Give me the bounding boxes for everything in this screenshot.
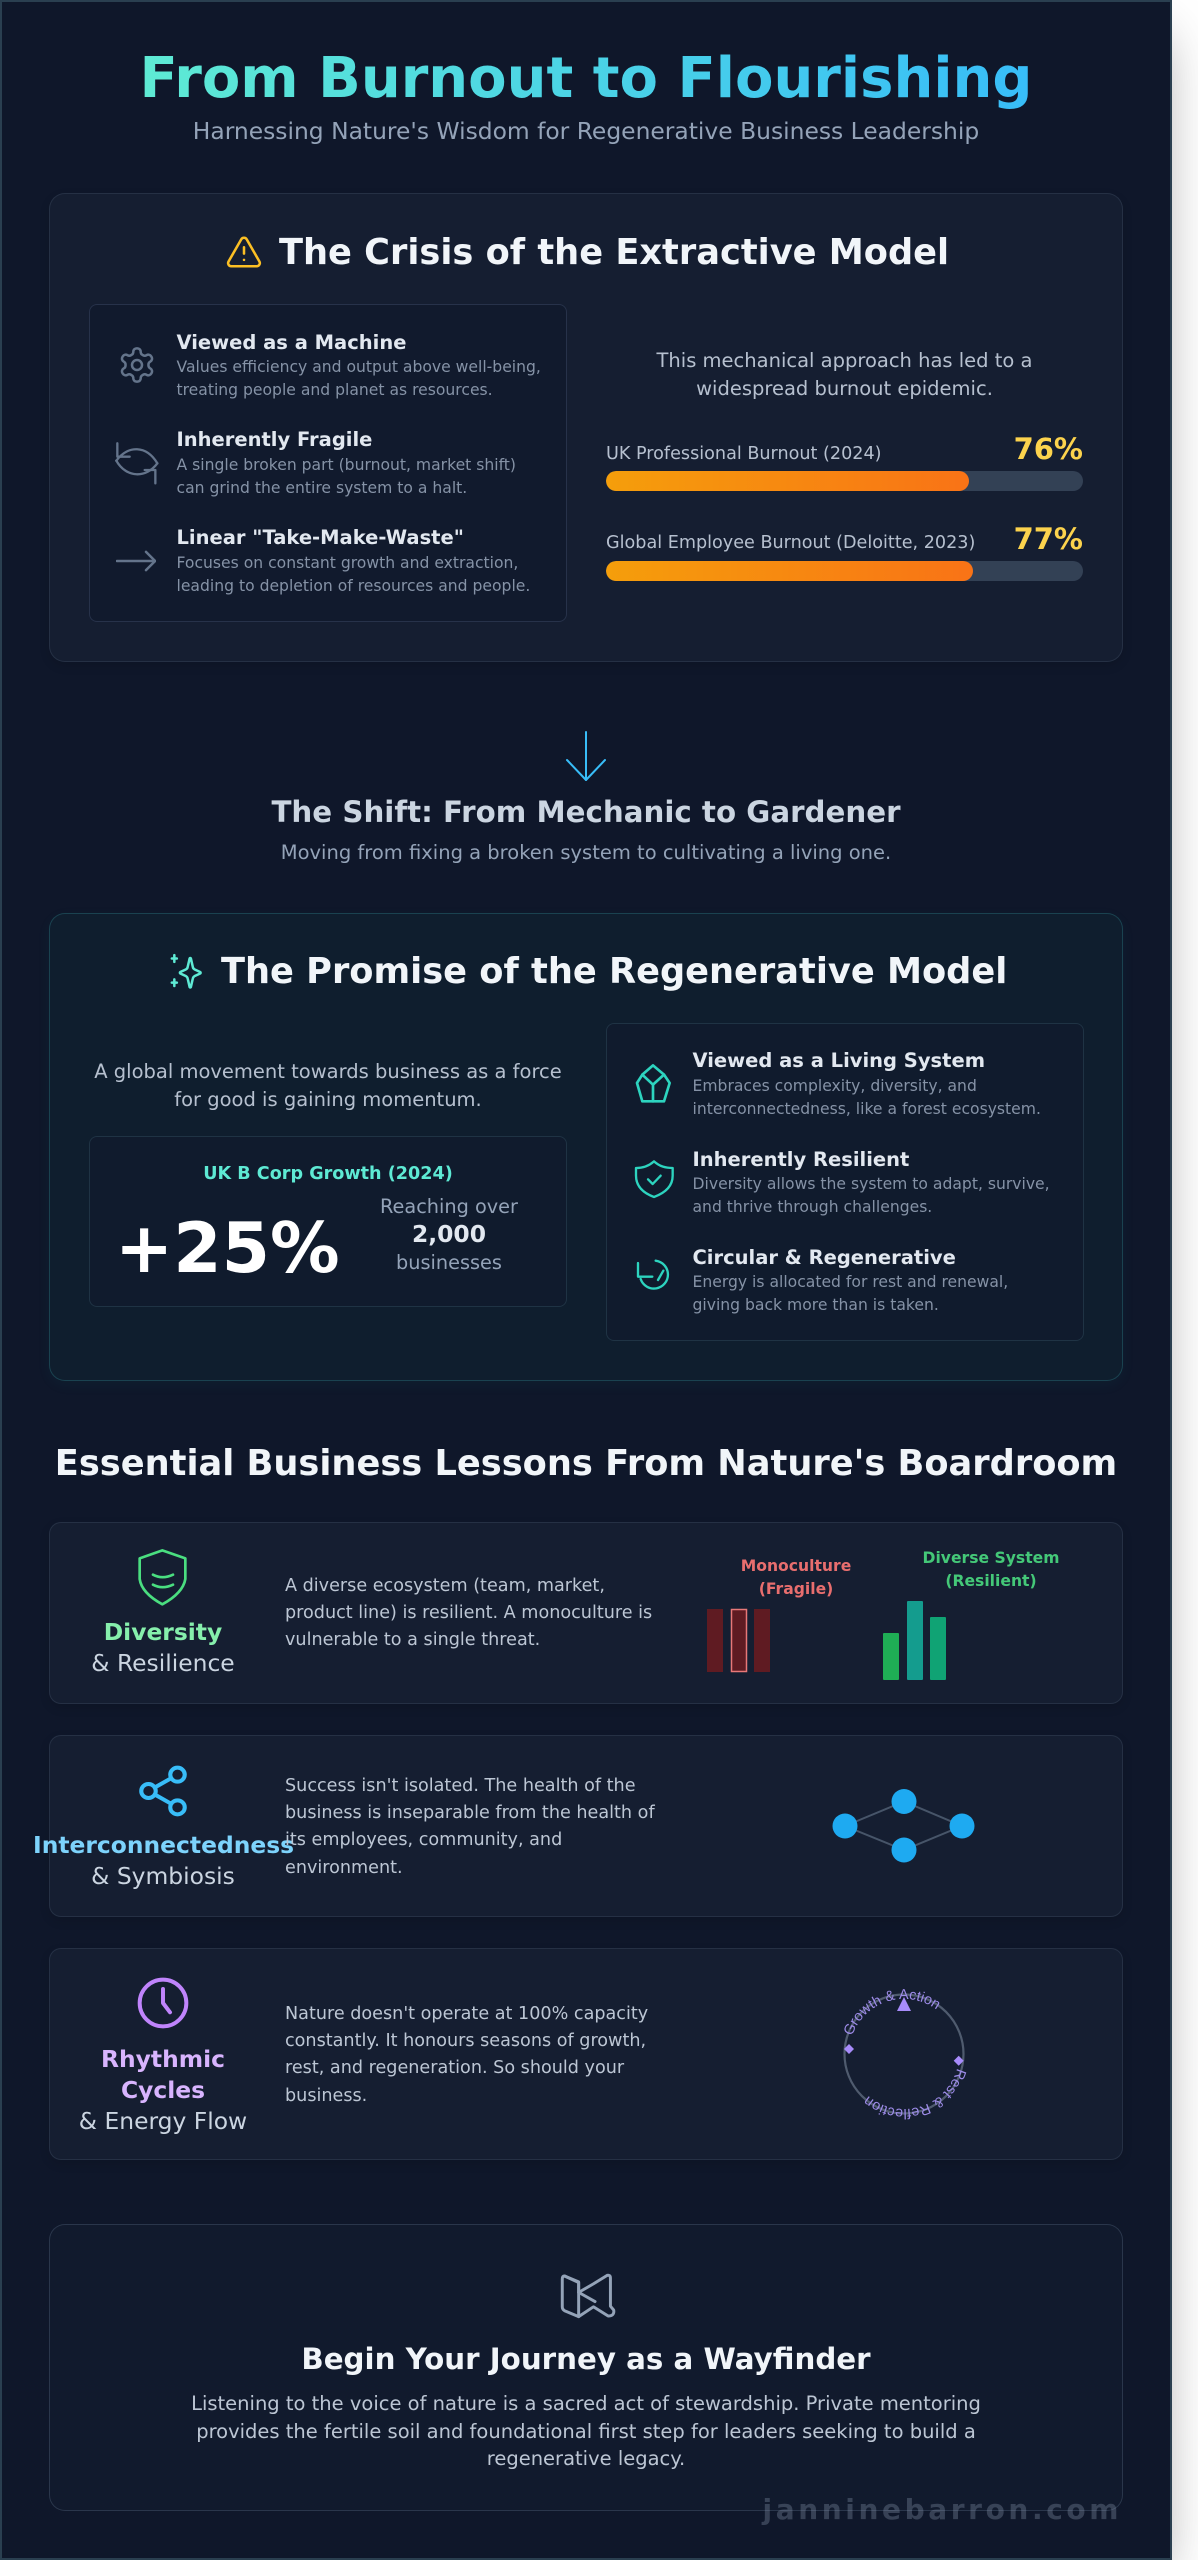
trait: living system	[636, 1049, 1041, 1118]
stat label: UK Professional Burnout (2024)	[606, 444, 882, 464]
chart label: monoculture: Monoculture	[741, 1557, 851, 1575]
heading: promise: The Promise of the Regenerative Model	[221, 951, 1007, 992]
card: rhythmic cycles	[49, 1948, 1123, 2160]
card description: constantly. It honours seasons of growth,	[285, 2031, 646, 2051]
progress bar	[606, 471, 1083, 491]
chart: monoculture vs diverse system: (Resilient)	[945, 1572, 1037, 1590]
chart label: diverse system: Diverse System	[923, 1549, 1059, 1567]
trait: circular	[636, 1246, 1008, 1314]
arrow: shift down	[566, 731, 606, 781]
shift subtitle: Moving from fixing a broken system to cultivating a living one.	[281, 841, 891, 864]
diagram: growth and rest cycle: Growth & Action	[844, 1989, 940, 2034]
card: diversity	[49, 1522, 1123, 1704]
call to action text	[49, 2390, 1123, 2473]
trait: viewed as a machine	[120, 330, 541, 399]
trait title: Viewed as a Living System	[692, 1049, 985, 1072]
stat value: 76%	[1014, 432, 1083, 466]
card title	[33, 1831, 294, 1890]
call to action text: Listening to the voice of nature is a sacred act of stewardship. Private mentoring	[191, 2392, 981, 2415]
card title: & Energy Flow	[79, 2106, 247, 2134]
trait description	[692, 1076, 1041, 1118]
icon: sparkles	[170, 954, 202, 989]
movement intro text: for good is gaining momentum.	[174, 1088, 482, 1111]
card description: Nature doesn't operate at 100% capacity	[285, 2004, 648, 2024]
trait: inherently fragile	[115, 428, 516, 497]
trait description: treating people and planet as resources.	[176, 381, 493, 399]
icon: gem	[636, 1064, 671, 1103]
title: From Burnout to Flourishing	[140, 46, 1032, 111]
trait description	[692, 1273, 1008, 1314]
icon: warning triangle	[226, 236, 262, 268]
trait description: A single broken part (burnout, market shift)	[176, 456, 516, 474]
trait: resilient	[634, 1148, 1050, 1216]
trait description: giving back more than is taken.	[692, 1296, 939, 1314]
trait description: Focuses on constant growth and extraction,	[176, 554, 518, 572]
stat context: Reaching over	[380, 1195, 518, 1218]
trait title: Circular & Regenerative	[692, 1246, 956, 1269]
card title: Rhythmic	[101, 2044, 225, 2072]
stat value: +25%	[115, 1208, 340, 1288]
stat: UK professional burnout	[606, 432, 1083, 491]
trait title: Linear "Take-Make-Waste"	[176, 526, 464, 549]
trait description: interconnectedness, like a forest ecosystem.	[692, 1100, 1041, 1118]
card title: Cycles	[121, 2076, 205, 2104]
trait description: can grind the entire system to a halt.	[176, 479, 467, 497]
stat context: businesses	[396, 1251, 502, 1274]
card title: & Resilience	[91, 1649, 235, 1677]
icon: map	[560, 2274, 616, 2318]
card description: its employees, community, and	[285, 1830, 562, 1850]
icon: shield with waves	[138, 1549, 187, 1606]
icon: arrow right	[116, 550, 156, 572]
trait title: Inherently Resilient	[692, 1148, 909, 1171]
card title	[79, 2044, 247, 2134]
diagram: growth and rest cycle	[843, 1989, 966, 2120]
stat value: 77%	[1014, 522, 1083, 556]
trait description: leading to depletion of resources and people.	[176, 577, 530, 595]
diagram: growth and rest cycle: Rest & Reflection	[864, 2069, 966, 2120]
trait description: Embraces complexity, diversity, and	[692, 1076, 977, 1094]
card description	[285, 1776, 656, 1878]
heading: crisis: The Crisis of the Extractive Model	[279, 232, 949, 273]
trait description	[176, 456, 516, 497]
trait description: Values efficiency and output above well-being,	[176, 358, 541, 376]
card title: & Symbiosis	[91, 1862, 235, 1890]
burnout intro text: widespread burnout epidemic.	[696, 376, 993, 400]
heading: the shift: The Shift: From Mechanic to Gardener	[271, 795, 901, 829]
stat label: UK B Corp Growth (2024)	[203, 1164, 453, 1184]
icon: broken cycle	[115, 442, 159, 484]
icon: shield check	[634, 1160, 674, 1198]
trait: linear take-make-waste	[116, 526, 530, 595]
card description: business is inseparable from the health of	[285, 1803, 655, 1823]
panel: call to action	[49, 2224, 1123, 2511]
trait description: Energy is allocated for rest and renewal,	[692, 1273, 1008, 1291]
heading: wayfinder: Begin Your Journey as a Wayfinder	[301, 2342, 871, 2376]
card description: rest, and regeneration. So should your	[285, 2058, 624, 2078]
stat context	[380, 1195, 518, 1274]
stat: global employee burnout	[606, 522, 1083, 581]
trait description	[176, 554, 530, 595]
stat label: Global Employee Burnout (Deloitte, 2023)	[606, 533, 975, 553]
card: interconnectedness	[49, 1735, 1123, 1917]
panel: promise of the regenerative model	[49, 913, 1123, 1381]
call to action text: provides the fertile soil and foundational first step for leaders seeking to build a	[196, 2420, 976, 2443]
panel: crisis of the extractive model	[49, 193, 1123, 662]
chart: monoculture vs diverse system	[707, 1549, 1059, 1680]
card description: vulnerable to a single threat.	[285, 1630, 540, 1650]
icon: share network	[139, 1766, 187, 1816]
panel: B Corp growth stat	[89, 1136, 567, 1307]
burnout intro text	[656, 349, 1032, 400]
trait title: Viewed as a Machine	[176, 330, 406, 354]
card description: environment.	[285, 1858, 403, 1878]
burnout intro text: This mechanical approach has led to a	[657, 349, 1032, 372]
call to action text: regenerative legacy.	[487, 2447, 685, 2470]
card description: A diverse ecosystem (team, market,	[285, 1576, 605, 1596]
trait title: Inherently Fragile	[176, 428, 372, 451]
chart: monoculture vs diverse system: (Fragile)	[759, 1580, 833, 1598]
panel: extractive traits list	[89, 304, 567, 622]
panel: regenerative traits list	[606, 1023, 1084, 1341]
card description: product line) is resilient. A monoculture is	[285, 1603, 652, 1623]
movement intro text: A global movement towards business as a force	[94, 1060, 562, 1083]
card description: Success isn't isolated. The health of the	[285, 1776, 636, 1796]
icon: gear	[120, 347, 154, 383]
stat context: 2,000	[412, 1220, 486, 1248]
movement intro text	[94, 1060, 562, 1111]
card description	[285, 2004, 648, 2106]
card title	[91, 1618, 235, 1677]
trait description: Diversity allows the system to adapt, survive,	[692, 1175, 1050, 1193]
card title: Interconnectedness	[33, 1831, 294, 1859]
icon: regenerative cycle	[636, 1260, 670, 1290]
watermark: janninebarron.com	[763, 2493, 1122, 2526]
icon: clock	[138, 1978, 188, 2028]
diagram: node network	[832, 1789, 974, 1862]
progress bar	[606, 561, 1083, 581]
trait description: and thrive through challenges.	[692, 1198, 932, 1216]
subtitle: Harnessing Nature's Wisdom for Regenerative Business Leadership	[193, 117, 979, 145]
card title: Diversity	[104, 1618, 222, 1646]
trait description	[692, 1175, 1050, 1216]
heading: essential lessons: Essential Business Lessons From Nature's Boardroom	[55, 1443, 1117, 1484]
card description	[285, 1576, 652, 1650]
trait description	[176, 358, 541, 399]
card description: business.	[285, 2086, 367, 2106]
